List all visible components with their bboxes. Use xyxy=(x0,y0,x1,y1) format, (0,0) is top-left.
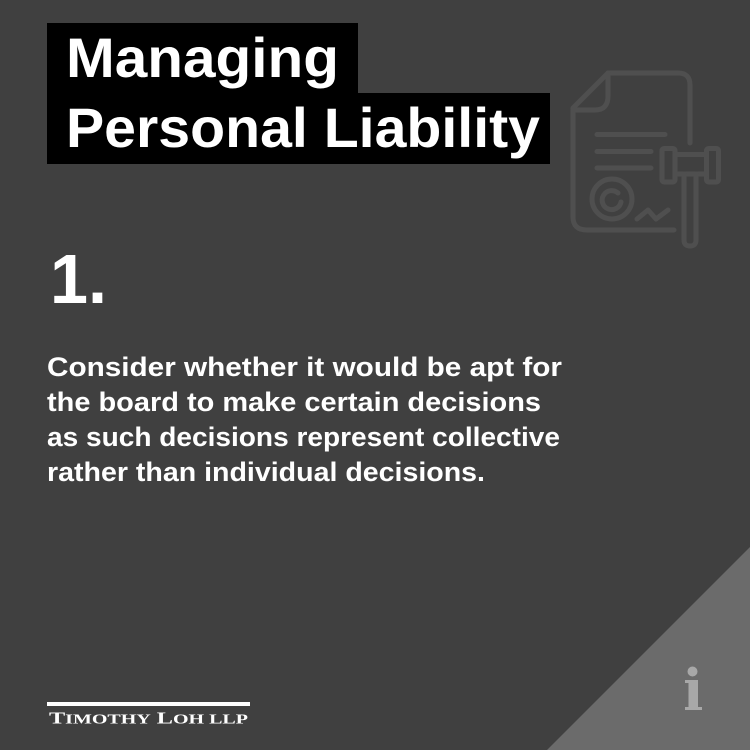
corner triangle with info icon xyxy=(547,547,750,750)
step number: 1. xyxy=(50,240,107,318)
icon: document with gavel xyxy=(573,73,718,246)
title line 2: Personal Liability xyxy=(66,96,540,159)
icon: info letter xyxy=(685,666,702,710)
body text: Consider whether it would be apt for xyxy=(47,352,563,382)
body text: rather than individual decisions. xyxy=(47,457,485,487)
footer logo: T IMOTHY L OH LLP xyxy=(49,708,249,728)
title line 1: Managing xyxy=(66,26,339,89)
title background xyxy=(47,23,550,164)
footer logo xyxy=(47,702,250,728)
body text xyxy=(47,352,563,487)
title xyxy=(47,23,550,164)
body text: as such decisions represent collective xyxy=(47,422,560,452)
body text: the board to make certain decisions xyxy=(47,387,541,417)
